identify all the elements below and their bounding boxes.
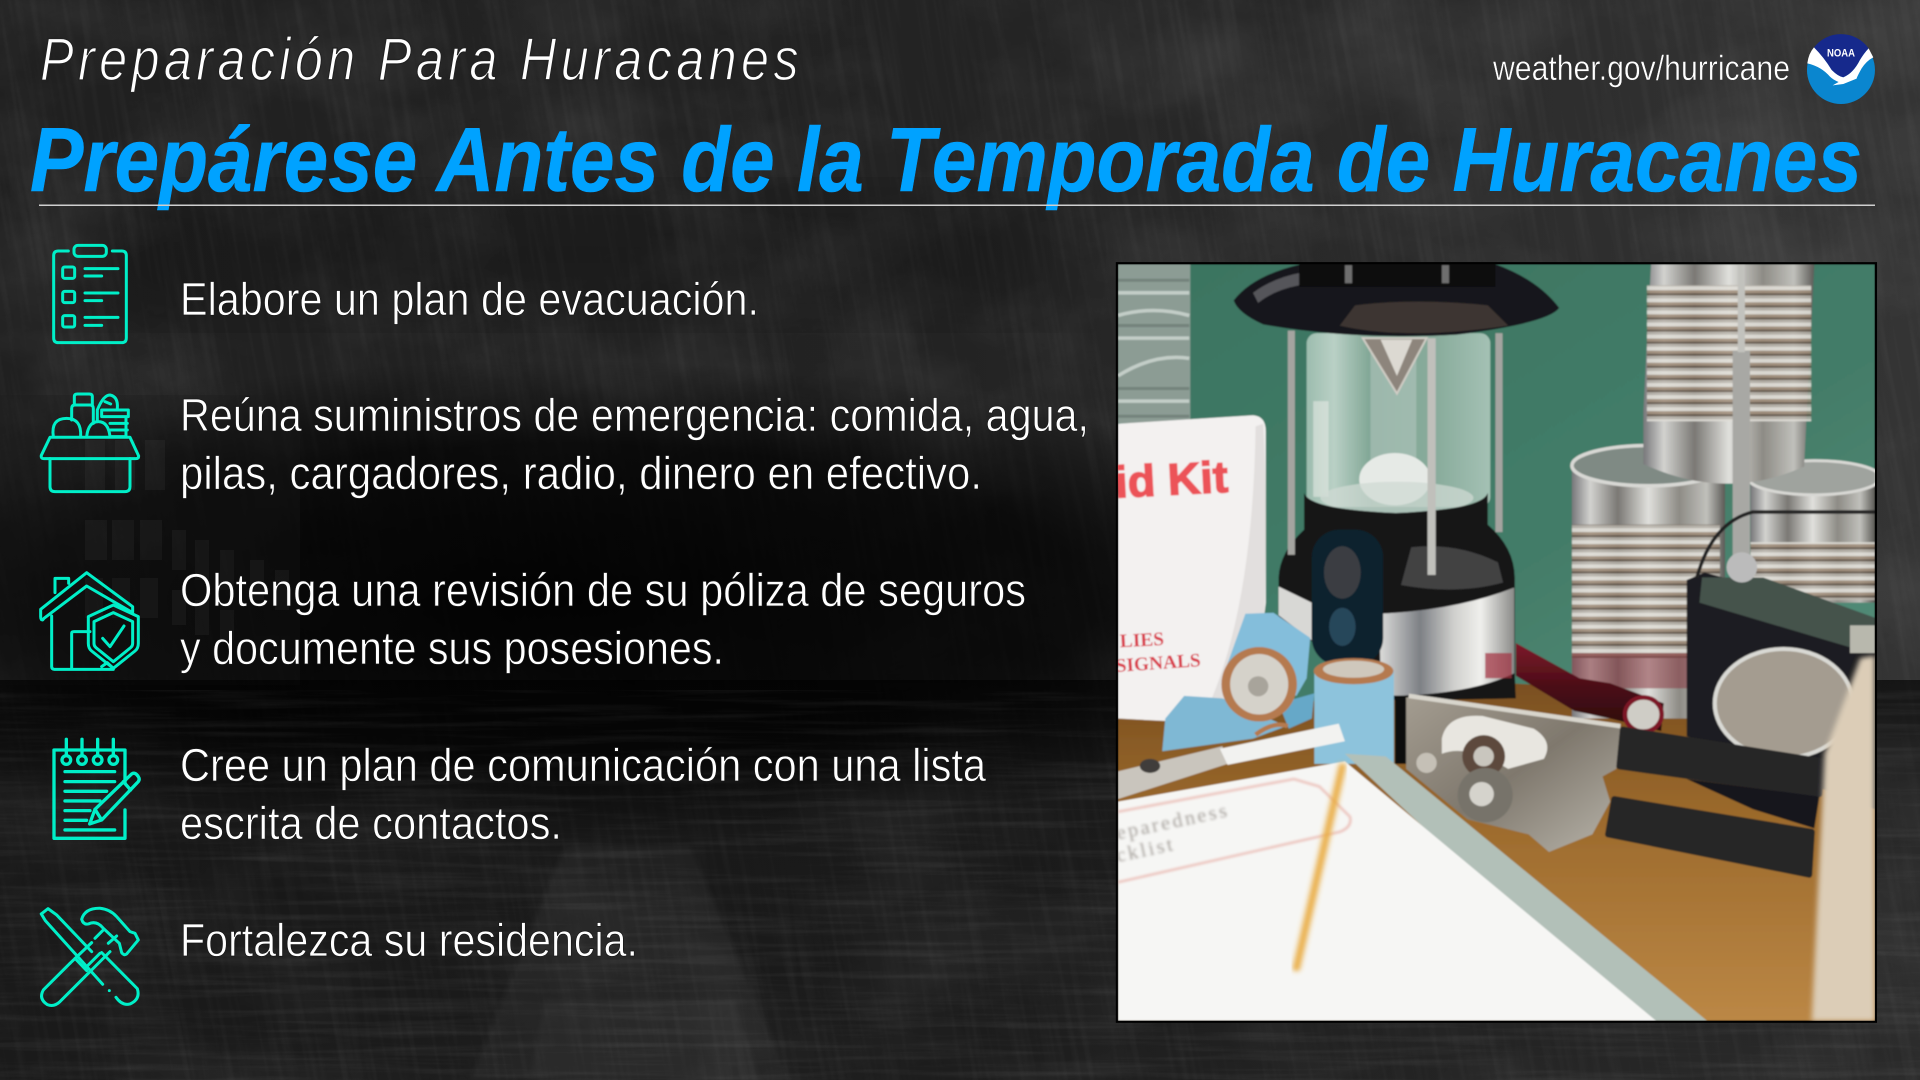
photo notebook spiral	[1812, 656, 1875, 1021]
photo can opener	[1395, 696, 1822, 875]
text: evacuation plan: Elabore un plan de evacuación.	[180, 273, 759, 325]
photo batteries	[1162, 613, 1394, 764]
photo lantern	[1234, 264, 1559, 701]
text: emergency supplies: pilas, cargadores, radio, dinero en efectivo.	[180, 447, 982, 499]
title: Preparación Para Huracanes: Preparación Para Huracanes	[40, 26, 799, 93]
photo clipboard and checklist: eparedness	[1114, 799, 1231, 844]
icon: house with shield	[41, 573, 138, 669]
photo far right can	[1748, 461, 1881, 603]
photo first aid kit	[1118, 414, 1268, 722]
photo radio	[1687, 264, 1875, 809]
photo: emergency supplies	[1081, 262, 1881, 1023]
photo wall	[1118, 264, 1875, 718]
icon: hammer and screwdriver	[41, 908, 138, 1005]
text: communication plan: escrita de contactos.	[180, 797, 562, 849]
text: insurance review: Obtenga una revisión de su póliza de seguros	[180, 564, 1026, 616]
icon: NOAA logo	[1807, 34, 1875, 104]
photo table	[1118, 683, 1875, 1021]
text: emergency supplies: Reúna suministros de emergencia: comida, agua,	[180, 389, 1089, 441]
text: insurance review: y documente sus posesiones.	[180, 622, 724, 674]
text: communication plan: Cree un plan de comunicación con una lista	[180, 739, 986, 791]
photo flashlight	[1516, 643, 1664, 732]
text: insurance review	[180, 564, 1026, 674]
photo clipboard and checklist: cklist	[1114, 833, 1177, 867]
icon: emergency supplies box	[41, 394, 139, 492]
photo first aid kit: LIES	[1119, 629, 1165, 652]
photo clipboard and checklist	[1114, 724, 1707, 1021]
icon: notepad and pencil	[54, 739, 139, 838]
text: strengthen home: Fortalezca su residencia.	[180, 914, 638, 966]
photo water bottle	[1118, 264, 1190, 423]
photo top can	[1643, 264, 1814, 484]
icon: evacuation checklist	[54, 245, 126, 343]
website url: weather.gov/hurricane	[1492, 49, 1790, 88]
text: communication plan	[180, 739, 986, 849]
photo first aid kit: Aid Kit	[1081, 453, 1229, 509]
text: emergency supplies	[180, 389, 1089, 499]
photo left can	[1572, 445, 1725, 719]
icon: NOAA logo: NOAA	[1827, 48, 1855, 60]
photo first aid kit: SIGNALS	[1115, 650, 1201, 677]
